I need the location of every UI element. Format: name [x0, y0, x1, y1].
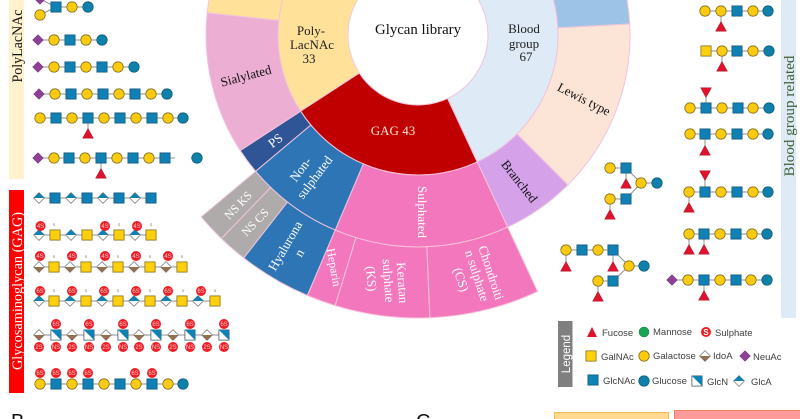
GAG row 3: 4S: [132, 254, 140, 260]
GAG row 5: 2S: [35, 345, 43, 351]
segment: GAG 43: GAG 43: [371, 123, 415, 138]
GAG row 2: S: [150, 222, 153, 227]
legend: IdoA: IdoA: [713, 351, 733, 362]
segment: Chondroitin sulphate: Chondroiti: [475, 243, 507, 302]
legend: IdoA: [700, 351, 733, 362]
GAG row 2: 4S: [101, 224, 109, 230]
glycan 3: [33, 62, 139, 72]
segment: Branched: [477, 134, 568, 227]
segment: Keratan sulphate: sulphate: [379, 259, 397, 303]
segment: Branched: Branched: [498, 157, 541, 206]
legend: Fucose: Fucose: [602, 328, 633, 339]
glycan 1: [35, 0, 93, 20]
glycan C: [685, 88, 774, 113]
GAG row 3: S: [181, 254, 184, 259]
GAG row 3: 4S: [68, 254, 76, 260]
glycan 5: [35, 113, 188, 138]
centre label: Glycan library: [375, 22, 461, 38]
GAG row 4: 6S: [68, 289, 76, 295]
segment: PolyLacNAc 33: LacNAc: [290, 37, 334, 52]
legend: Galactose: Galactose: [653, 351, 696, 362]
legend: [558, 321, 782, 388]
segment: Blood group 67: [430, 0, 558, 162]
GAG row 4: 6S: [36, 289, 44, 295]
GAG row 5: 2S: [169, 345, 177, 351]
GAG row 5: 6S: [85, 322, 93, 328]
GAG row 6: 6S: [52, 371, 60, 377]
bar: GAG: Glycosaminoglycan (GAG): [10, 212, 26, 370]
segment: PS: PS: [265, 130, 286, 151]
GAG row 2: 4S: [37, 224, 44, 230]
legend: GalNAc: [586, 351, 634, 363]
legend: Sulphate: Sulphate: [715, 328, 753, 339]
GAG row 6: 6S: [36, 371, 44, 377]
glycan F: [684, 229, 772, 254]
GAG row 5: NS: [52, 345, 60, 351]
glycan 2: [33, 35, 107, 45]
segment: Blood group 67: Blood: [508, 21, 540, 36]
segment: Non-sulphated: [256, 125, 363, 230]
GAG row 3: [34, 251, 187, 272]
segment: Non-sulphated: sulphated: [293, 152, 336, 202]
glycan E: [684, 171, 773, 212]
legend: Sulphate: S: [703, 328, 709, 337]
legend: NeuAc: [740, 351, 782, 363]
GAG row 5: 6S: [119, 322, 127, 328]
segment: Sialylated: Sialylated: [219, 62, 273, 90]
segment: Sulphated: [335, 162, 508, 247]
GAG row 5: NS: [220, 345, 228, 351]
GAG row 5: 2S: [135, 345, 143, 351]
segment: Keratan sulphate: Keratan: [394, 262, 411, 304]
legend: Mannose: Mannose: [653, 327, 692, 338]
GAG row 3: S: [149, 254, 152, 259]
segment: PolyLacNAc 33: [278, 0, 394, 111]
GAG row 2: S: [118, 222, 121, 227]
segment: Lewis type: [517, 24, 630, 185]
segment: NS CS: NS CS: [239, 205, 272, 239]
segment: Hyaluronan: Hyalurona: [265, 218, 305, 273]
branched glycan I: [561, 245, 649, 301]
glycan 4: [34, 89, 172, 99]
segment: Keratan sulphate: (KS): [363, 266, 380, 292]
segment: Chondroitin sulphate: (CS): [450, 266, 472, 294]
GAG row 4: S: [85, 288, 88, 293]
segment: NS CS: [221, 188, 288, 258]
segment: PS: [240, 111, 311, 171]
legend: GlcNAc: GlcNAc: [603, 376, 635, 387]
GAG row 5: 6S: [152, 322, 160, 328]
legend: GlcA: [734, 376, 772, 388]
GAG row 4: S: [214, 288, 217, 293]
GAG row 6: 6S: [84, 371, 92, 377]
GAG row 5: 6S: [220, 322, 228, 328]
segment: Lewis type: Lewis type: [555, 79, 613, 119]
bar: PolyLacNAc: PolyLacNAc: [10, 9, 26, 82]
bar: PolyLacNAc: [9, 0, 26, 179]
glycan 6: [33, 153, 202, 178]
segment: Heparin: [307, 230, 356, 306]
GAG row 3: 4S: [164, 254, 172, 260]
legend: Fucose: [587, 327, 633, 339]
GAG row 6: [35, 368, 188, 389]
segment: Chondroitin sulphate: n sulphate: [462, 248, 493, 303]
GAG row 2: [34, 221, 156, 240]
GAG row 5: NS: [152, 345, 160, 351]
GAG row 3: S: [117, 254, 120, 259]
GAG row 5: NS: [119, 345, 127, 351]
segment: Non-sulphated: Non-: [286, 154, 314, 184]
red box: [674, 410, 800, 419]
GAG row 5: 2S: [203, 345, 211, 351]
segment: Chondroitin sulphate: [427, 227, 538, 318]
GAG row 2: S: [53, 222, 56, 227]
legend: GalNAc: GalNAc: [601, 352, 634, 363]
GAG row 5: [34, 319, 229, 352]
segment: Hyaluronan: [244, 202, 335, 296]
glycan A: [700, 6, 773, 31]
legend: GlcA: GlcA: [751, 377, 772, 388]
GAG row 1: [34, 193, 156, 203]
GAG row 6: 6S: [131, 371, 139, 377]
segment: GAG 43: [301, 73, 477, 175]
legend: NeuAc: NeuAc: [753, 352, 782, 363]
segment: Blood group 67: group: [509, 36, 539, 51]
segment: blood group upper: [539, 0, 630, 28]
GAG row 4: [34, 286, 220, 306]
GAG row 4: 6S: [197, 289, 205, 295]
GAG row 5: NS: [85, 345, 93, 351]
panel: Glycosaminoglycan: [9, 190, 229, 393]
segment: Keratan sulphate: [335, 238, 430, 318]
segment: NS KS: NS KS: [221, 188, 255, 222]
segment: Hyaluronan: n: [291, 246, 307, 259]
segment: upper left yellow: [207, 0, 303, 20]
legend tab: Legend: [561, 335, 573, 373]
GAG row 4: 6S: [132, 289, 140, 295]
panel: PolyLacNAc: [9, 0, 202, 179]
segment: NS KS: [201, 171, 271, 239]
GAG row 5: NS: [186, 345, 194, 351]
GAG row 3: S: [53, 254, 56, 259]
GAG row 5: 2S: [68, 345, 76, 351]
legend: Sulphate: [701, 327, 753, 339]
GAG row 3: 4S: [101, 254, 109, 260]
GAG row 3: S: [85, 254, 88, 259]
GAG row 6: 6S: [68, 371, 76, 377]
GAG row 4: 6S: [100, 289, 108, 295]
segment: PolyLacNAc 33: Poly-: [297, 23, 325, 38]
bar: Blood group related: [781, 0, 798, 318]
glycan D: [685, 129, 773, 155]
GAG row 5: 6S: [186, 322, 194, 328]
segment: Blood group 67: 67: [520, 49, 533, 64]
GAG row 2: 4S: [133, 224, 141, 230]
GAG row 5: 6S: [52, 322, 60, 328]
segment: Sulphated: Sulphated: [415, 186, 430, 238]
GAG row 4: S: [182, 288, 185, 293]
legend: GlcNAc: [588, 375, 635, 387]
GAG row 4: S: [117, 288, 120, 293]
legend: GlcN: GlcN: [707, 377, 728, 388]
legend: Glucose: Glucose: [652, 376, 687, 387]
legend: GlcN: [692, 376, 728, 388]
GAG row 4: 6S: [164, 289, 172, 295]
GAG row 4: S: [53, 288, 56, 293]
glycan G: [667, 275, 772, 300]
GAG row 4: S: [149, 288, 152, 293]
orange box: [554, 412, 668, 419]
panel: sunburst chart: [201, 0, 630, 318]
legend tab: [558, 321, 573, 387]
glycan B: [701, 46, 774, 71]
segment: Sialylated: [206, 13, 301, 150]
GAG row 3: 4S: [36, 254, 44, 260]
panel: Blood group related: [561, 0, 798, 318]
GAG row 5: 2S: [102, 345, 110, 351]
bar: Blood group related: Blood group related: [782, 55, 798, 177]
segment: Heparin: Heparin: [324, 247, 344, 288]
GAG row 6: 6S: [148, 371, 156, 377]
segment: PolyLacNAc 33: 33: [302, 51, 316, 66]
branched glycan H: [605, 163, 662, 219]
